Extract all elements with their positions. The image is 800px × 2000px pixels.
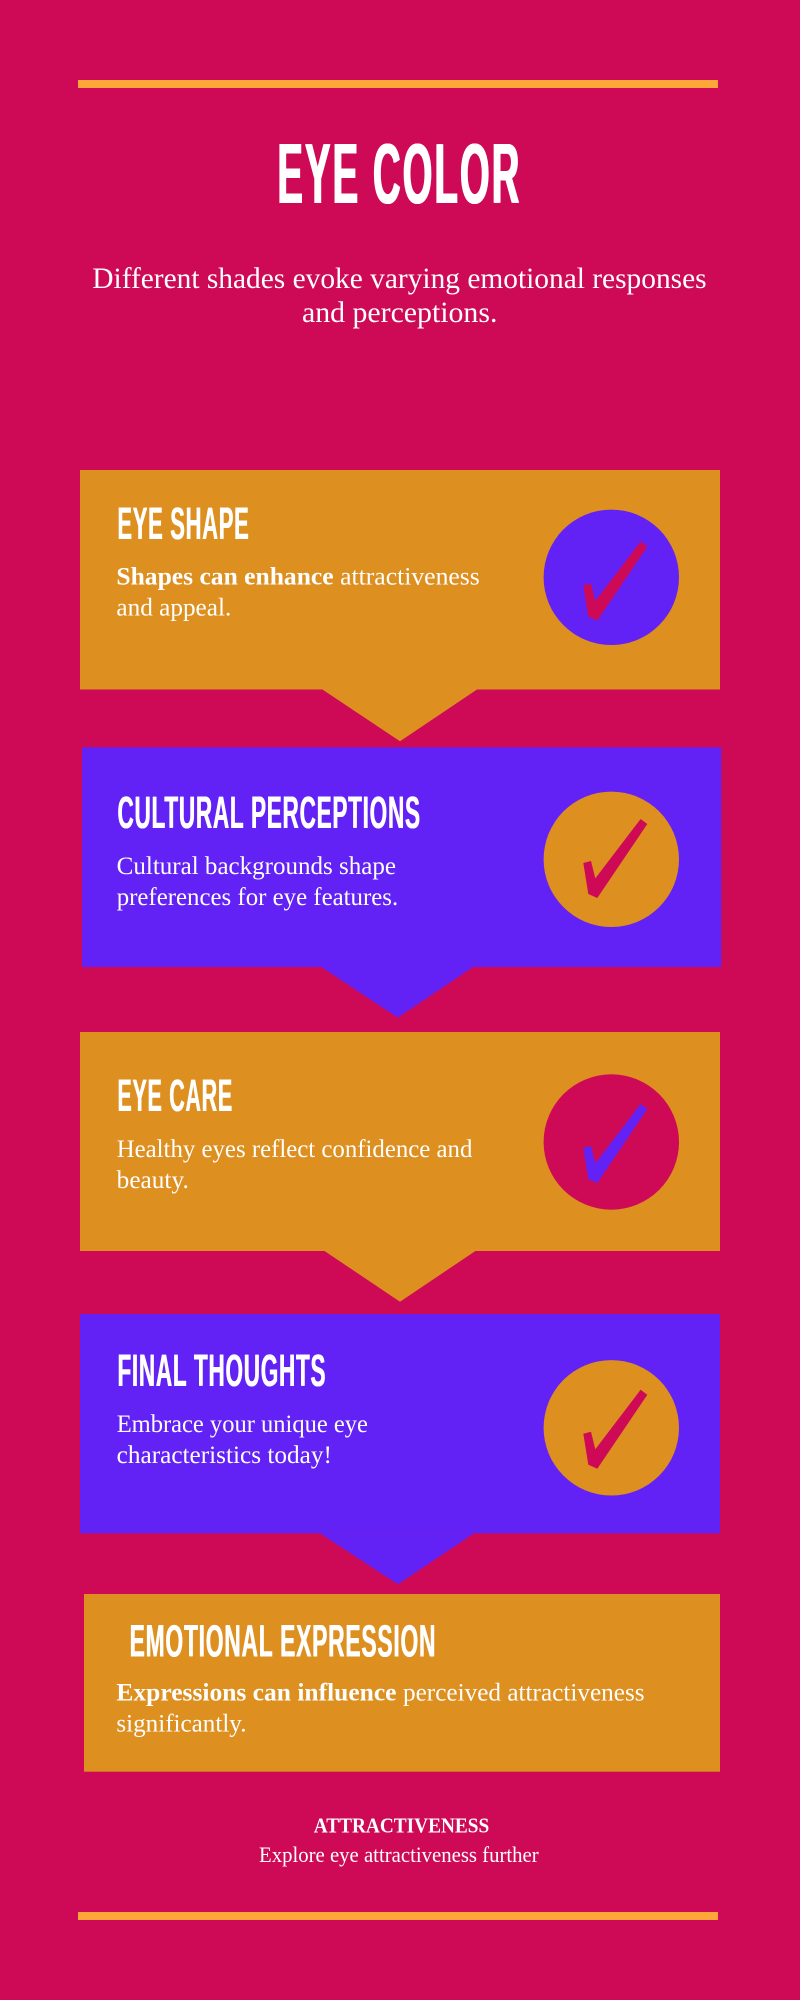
panel: cultural perceptions <box>82 747 721 1018</box>
text: eye shape description: Shapes can enhance <box>116 564 334 590</box>
text: cultural perceptions description <box>117 853 398 911</box>
panel background with pointer <box>82 747 721 1018</box>
icon: check badge <box>544 1360 679 1496</box>
panel background with pointer <box>80 1032 720 1302</box>
bottom accent bar <box>78 1912 718 1920</box>
panel: eye care <box>80 1032 720 1302</box>
panel background with pointer <box>80 1314 720 1584</box>
text: final thoughts description: characteristics today! <box>117 1442 332 1469</box>
footer heading: ATTRACTIVENESS <box>314 1813 489 1837</box>
text: eye shape description <box>116 564 480 622</box>
footer text: Explore eye attractiveness further <box>259 1842 539 1867</box>
icon: check badge <box>544 792 679 927</box>
icon: check badge <box>544 1074 679 1210</box>
text: eye care description <box>117 1136 473 1194</box>
panel: eye care: EYE CARE <box>117 1070 233 1121</box>
panel: emotional expression <box>84 1594 720 1772</box>
subtitle <box>92 263 707 329</box>
text: eye shape description: and appeal. <box>116 594 231 622</box>
text: eye care description: beauty. <box>117 1167 189 1194</box>
heading: emotional expression: EMOTIONAL EXPRESSION <box>129 1616 436 1667</box>
text: cultural perceptions description: Cultural backgrounds shape <box>117 853 396 880</box>
text: eye shape description: attractiveness <box>340 564 480 590</box>
panel: final thoughts: FINAL THOUGHTS <box>117 1345 326 1396</box>
text: emotional expression description: significantly. <box>116 1710 247 1738</box>
text: emotional expression description: perceived attractiveness <box>403 1680 645 1706</box>
subtitle: Different shades evoke varying emotional responses <box>92 263 707 295</box>
text: final thoughts description <box>117 1411 368 1469</box>
text: final thoughts description: Embrace your unique eye <box>117 1411 368 1438</box>
footer <box>259 1813 539 1867</box>
panel: eye shape: EYE SHAPE <box>117 498 249 549</box>
text: eye care description: Healthy eyes reflect confidence and <box>117 1136 473 1163</box>
text: emotional expression description: Expressions can influence <box>116 1680 397 1706</box>
subtitle: and perceptions. <box>302 297 497 329</box>
panel: final thoughts <box>80 1314 720 1584</box>
panel: eye shape <box>80 470 720 741</box>
text: emotional expression description <box>116 1680 645 1738</box>
text: cultural perceptions description: preferences for eye features. <box>117 884 398 911</box>
panel background <box>84 1594 720 1772</box>
panel: cultural perceptions: CULTURAL PERCEPTIONS <box>117 787 420 838</box>
icon: check badge <box>544 510 679 645</box>
panel background with pointer <box>80 470 720 741</box>
top accent bar <box>78 80 718 88</box>
